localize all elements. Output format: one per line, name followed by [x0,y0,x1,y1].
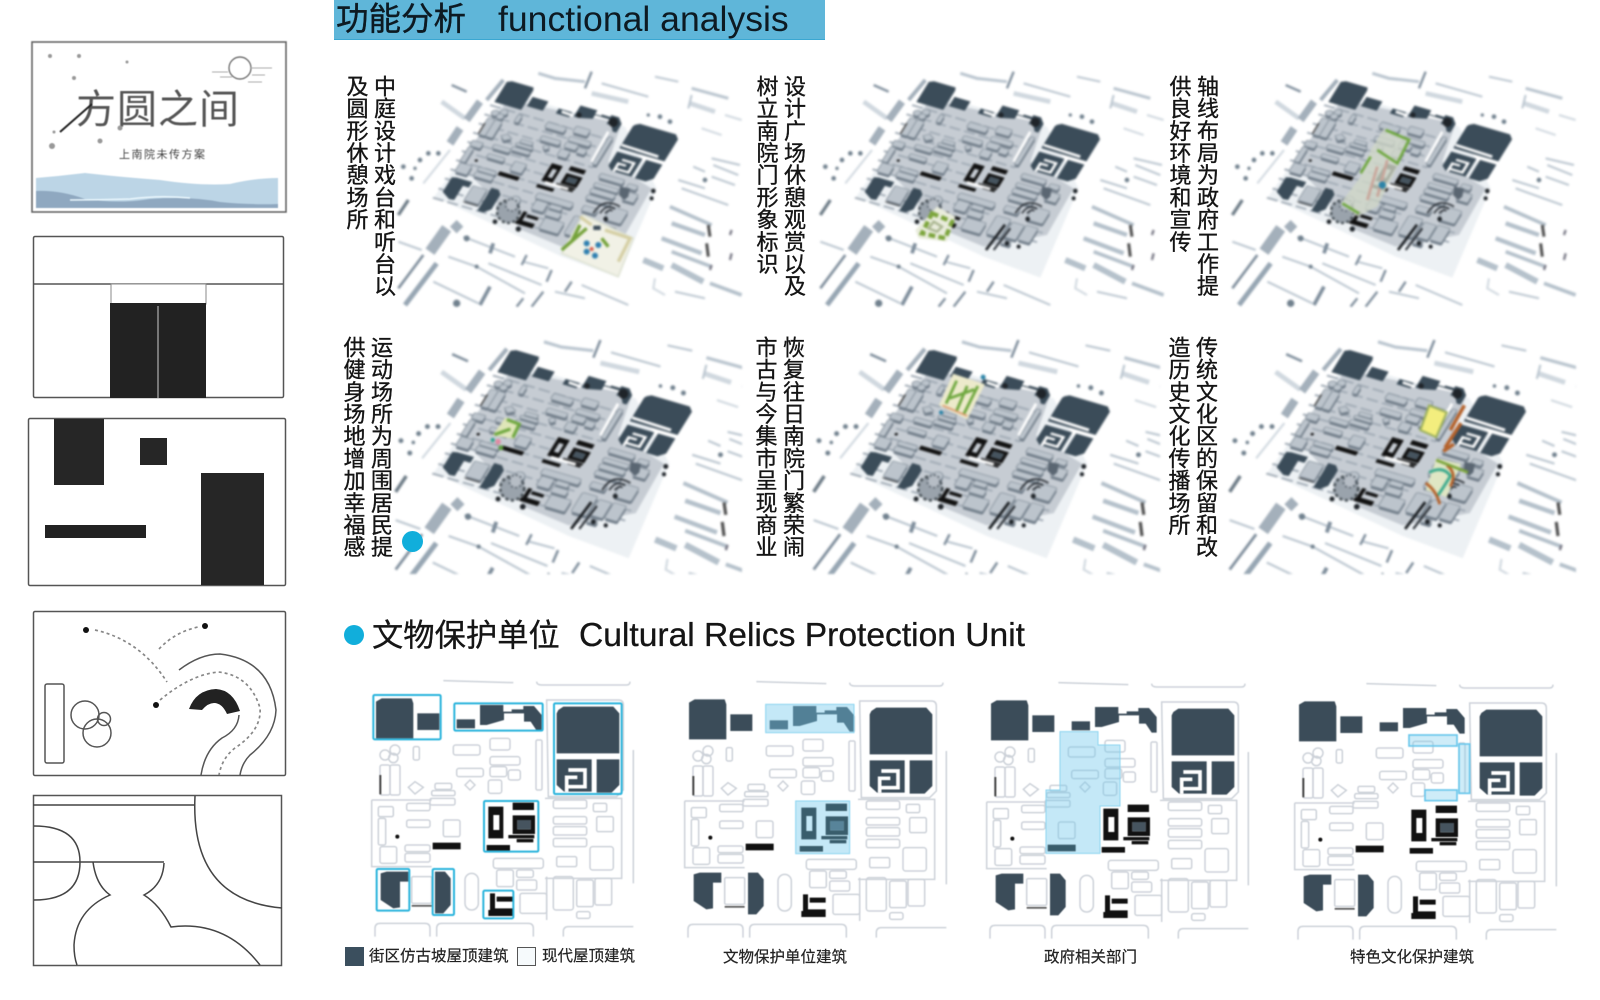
caption: plaza: 设计广场休憩观赏以及 [781,75,806,297]
caption: courtyard stage [344,75,396,297]
plan 2: protected heritage buildings [684,680,948,938]
panel: cover thumbnail [30,40,288,214]
swatch: dark roof [345,947,364,966]
title bar: 功能分析 [336,1,466,37]
caption: courtyard stage: 中庭设计戏台和听台以 [371,75,396,297]
caption: heritage [1166,336,1218,558]
label: dark roof: 街区仿古坡屋顶建筑 [369,948,509,965]
marker: blue dot [402,530,422,552]
caption: market: 恢复往日南院门繁荣闹 [780,336,805,558]
label: protected buildings: 文物保护单位建筑 [723,949,847,966]
section heading: cultural relics protection unit [372,617,1025,654]
panel: vase line composition [32,794,282,966]
panel: axonometric 5 market [752,336,1162,576]
label: characteristic buildings: 特色文化保护建筑 [1350,949,1474,966]
panel: axonometric 6 heritage [1166,336,1578,576]
caption: courtyard stage: 及圆形休憩场所 [344,75,368,230]
caption: market: 市古与今集市呈现商业 [752,336,778,558]
title bar: functional analysis [498,0,789,39]
caption: sports ground: 运动场所为周围居民提 [368,336,393,558]
section heading: cultural relics protection unit: 文物保护单位 [372,618,560,653]
caption: axis layout [1166,75,1219,297]
panel: axonometric 4 sports ground [340,336,744,576]
panel: axonometric 3 axis layout [1166,70,1577,308]
panel: cover thumbnail: 方圆之间 [76,77,240,135]
panel: axonometric 1 courtyard stage [344,70,743,308]
panel: cover thumbnail: 上南院未传方案 [119,146,206,162]
swatch: modern roof [517,947,536,966]
plan 4: characteristic culture buildings [1294,682,1558,940]
plan 1: roofs with cyan outlines [370,680,634,937]
section heading: cultural relics protection unit: Cultural Relics Protection Unit [579,617,1025,654]
title bar [334,0,825,40]
caption: axis layout: 轴线布局为政府工作提 [1194,75,1219,297]
caption: sports ground [340,336,393,558]
plan 3: government departments [986,682,1250,939]
caption: plaza: 树立南院门形象标识 [754,75,778,275]
caption: heritage: 传统文化区的保留和改 [1193,336,1218,558]
caption: axis layout: 供良好环境和宣传 [1166,75,1192,253]
panel: black rectangle composition [28,418,286,586]
section bullet [344,625,364,645]
panel: axonometric 2 plaza [754,70,1165,308]
panel: path and circle composition [32,610,286,776]
caption: market [752,336,805,558]
label: modern roof: 现代屋顶建筑 [542,948,635,965]
caption: heritage: 造历史文化传播场所 [1166,336,1190,536]
caption: sports ground: 供健身场地增加幸福感 [340,336,366,558]
panel: door elevation diagram [32,236,284,398]
label: government departments: 政府相关部门 [1044,949,1137,966]
caption: plaza [754,75,806,297]
legend: roof types [345,947,635,966]
